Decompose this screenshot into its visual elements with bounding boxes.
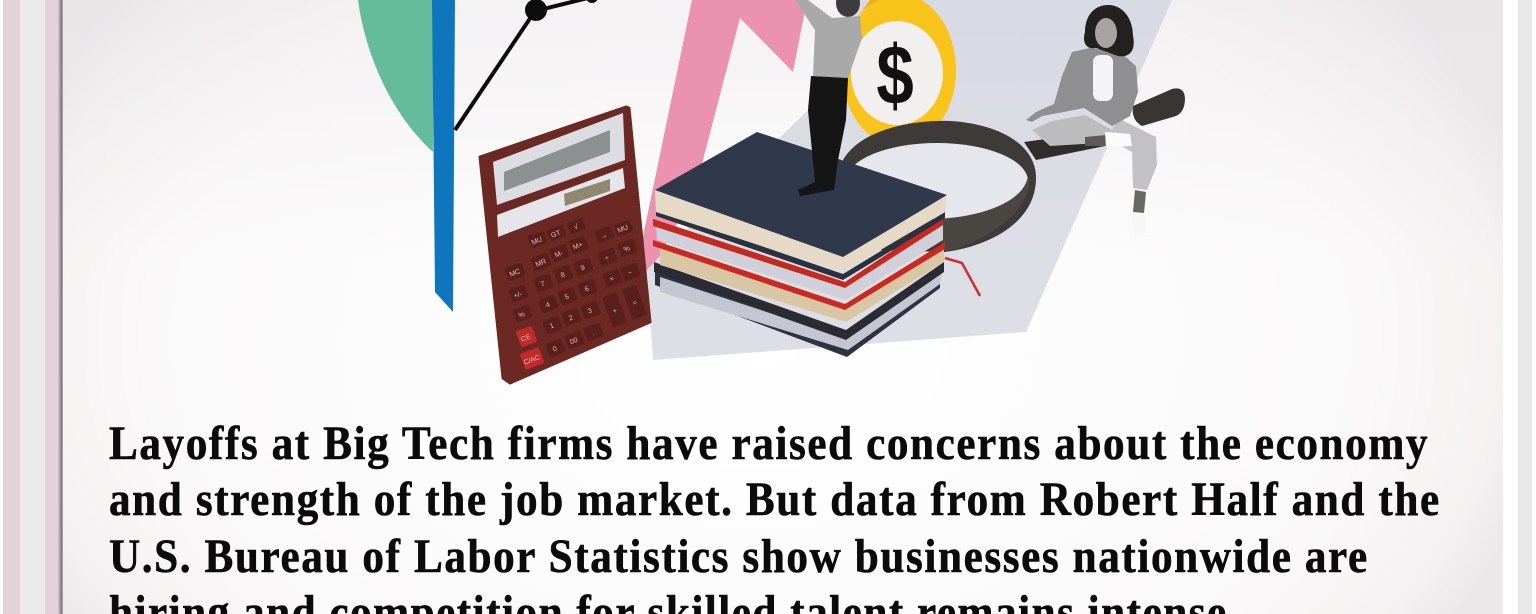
stack of books <box>653 132 980 357</box>
calculator keys: 00 <box>569 337 579 346</box>
calculator keys: % <box>518 311 526 320</box>
cardigan <box>1026 48 1138 126</box>
calculator keys: CE <box>520 333 532 344</box>
calculator keys <box>504 217 647 370</box>
body text <box>109 416 1439 614</box>
calculator keys: √ <box>573 223 579 231</box>
magnifying glass <box>843 88 1185 252</box>
green semicircle <box>358 0 433 152</box>
calculator keys: GT <box>550 229 562 240</box>
calculator keys: M- <box>554 250 565 259</box>
calculator keys: 0 <box>552 346 558 353</box>
calculator keys: . <box>591 330 595 337</box>
calculator keys: 4 <box>545 302 551 309</box>
calculator keys: × <box>609 275 615 284</box>
text line 3: U.S. Bureau of Labor Statistics show businesses nationwide are <box>109 529 1367 583</box>
calculator keys: 1 <box>549 323 555 330</box>
calculator keys: ÷ <box>604 255 610 262</box>
calculator keys: = <box>632 299 638 308</box>
man figure <box>795 0 862 196</box>
blue bar <box>432 0 455 312</box>
woman figure <box>1026 5 1157 236</box>
calculator keys: → <box>599 232 609 241</box>
calculator keys: 3 <box>587 308 593 315</box>
pink arrow <box>636 0 807 272</box>
text line 2: and strength of the job market. But data from Robert Half and the <box>109 472 1439 526</box>
calculator <box>480 107 650 383</box>
calculator keys: M+ <box>572 241 584 252</box>
calculator keys: + <box>612 307 618 316</box>
line chart <box>455 0 598 130</box>
calculator keys: 8 <box>560 272 566 279</box>
dollar coin: $ <box>876 29 914 123</box>
illustration: collage <box>358 0 1185 383</box>
calculator keys: MU <box>617 224 629 235</box>
calculator keys: +/- <box>513 291 524 300</box>
calculator keys: 7 <box>540 281 546 288</box>
calculator keys: 6 <box>584 286 590 293</box>
gray parallelogram backdrop <box>647 0 1172 360</box>
calculator keys: 5 <box>564 294 570 301</box>
calculator keys: MU <box>531 236 543 247</box>
calculator keys: MR <box>535 258 547 269</box>
calculator keys: MC <box>509 268 521 279</box>
dollar coin <box>842 0 956 146</box>
hair and face <box>1084 5 1134 56</box>
text line 1: Layoffs at Big Tech firms have raised concerns about the economy <box>109 416 1428 470</box>
calculator keys: % <box>623 245 631 254</box>
calculator keys: 9 <box>580 265 586 272</box>
calculator keys: C/AC <box>523 354 541 367</box>
calculator keys: 2 <box>568 315 574 322</box>
legs <box>1032 115 1112 146</box>
ribbon <box>945 258 980 296</box>
calculator keys: − <box>627 269 633 278</box>
